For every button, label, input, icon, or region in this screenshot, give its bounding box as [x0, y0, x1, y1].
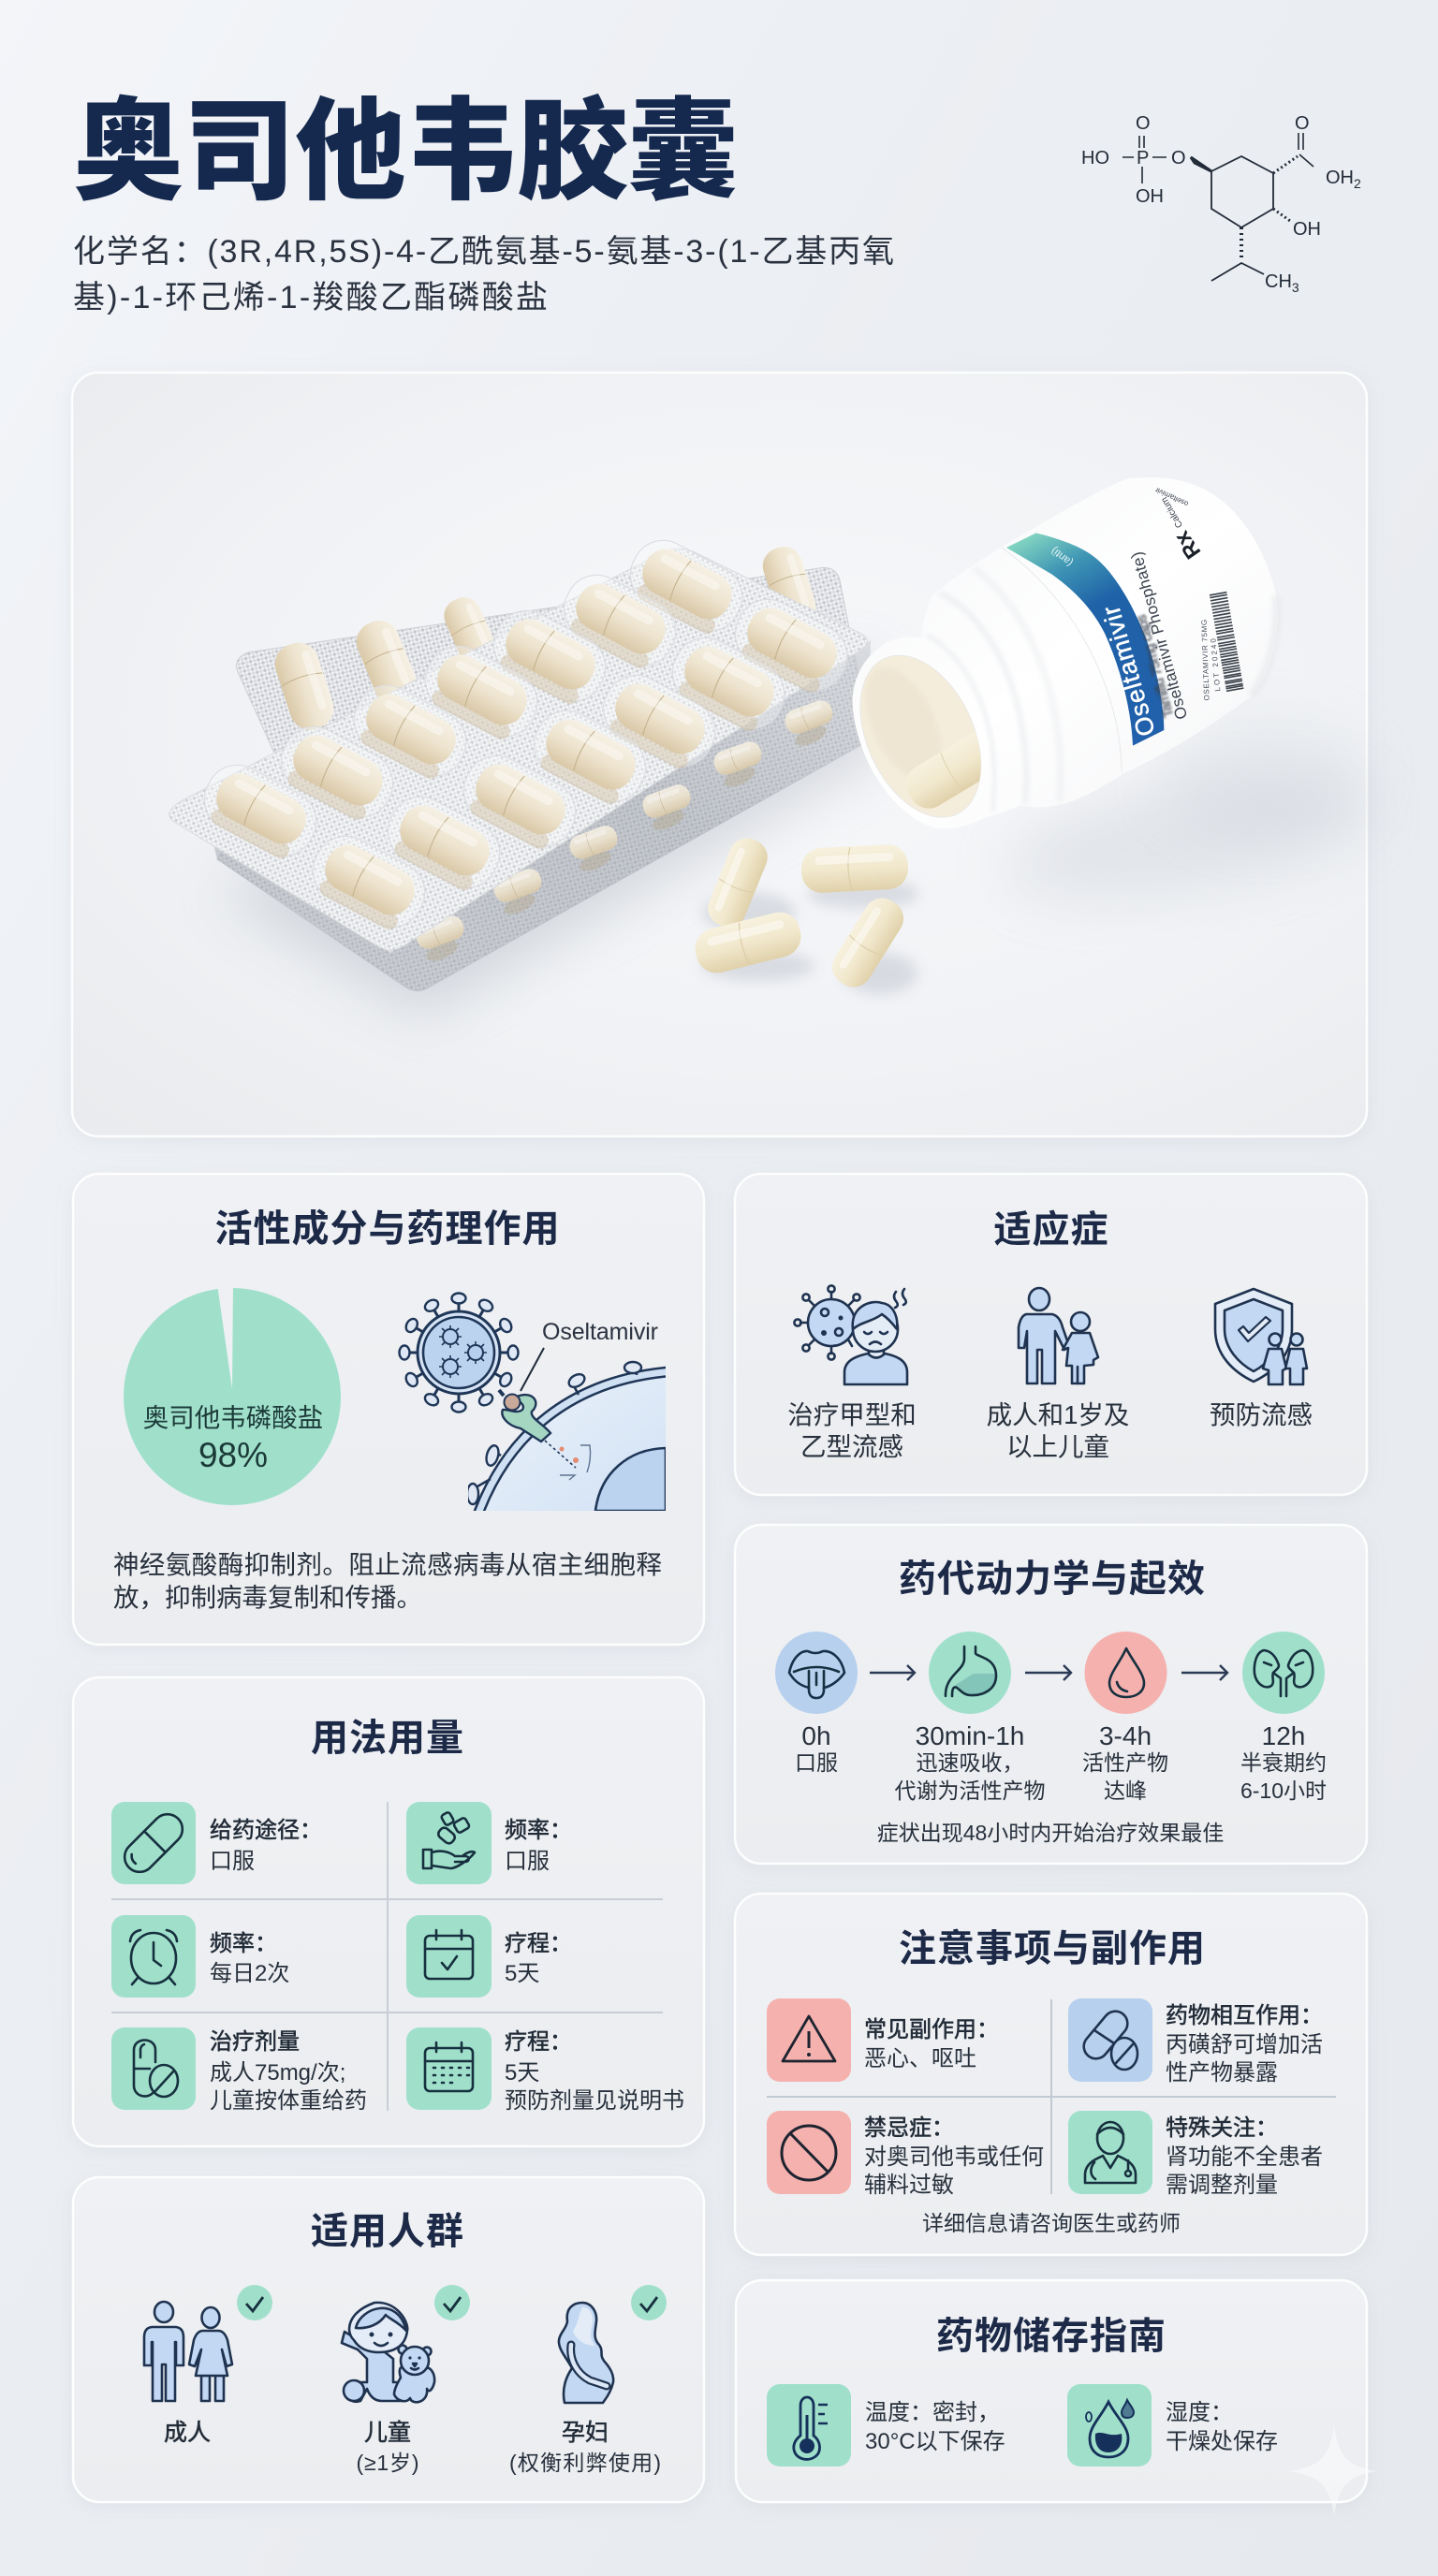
subtitle: chemical name: 化学名：(3R,4R,5S)-4-乙酰氨基-5-氨基-3-(1-乙基丙氧	[73, 234, 894, 270]
item: common side effects	[767, 1998, 999, 2082]
pill bottle with label: Calcium	[1159, 495, 1185, 530]
soft shadows under product	[215, 655, 1383, 1016]
pie chart 98%	[124, 1282, 341, 1505]
item: special attention: 需调整剂量	[1166, 2173, 1278, 2198]
item: treatment dose: 治疗剂量	[210, 2029, 300, 2055]
timeline labels: 6-10小时	[1240, 1778, 1327, 1803]
item: drug interaction: 丙磺舒可增加活	[1166, 2032, 1323, 2057]
back blister pack	[211, 542, 871, 991]
subtitle: chemical name	[73, 234, 894, 315]
item: temperature	[767, 2384, 1005, 2466]
step 2: stomach icon	[929, 1632, 1011, 1714]
item: contraindication: 禁忌症：	[864, 2115, 954, 2141]
adults: 成人	[164, 2420, 211, 2446]
item: route	[111, 1802, 322, 1884]
item: frequency oral: 频率：	[505, 1818, 572, 1843]
note: 症状出现48小时内开始治疗效果最佳	[877, 1821, 1224, 1845]
pie chart 98%: 奥司他韦磷酸盐	[143, 1403, 323, 1432]
heading: 适用人群	[311, 2211, 464, 2252]
timeline labels: 活性产物	[1082, 1750, 1168, 1775]
heading: 药物储存指南	[936, 2316, 1167, 2357]
item: frequency daily	[111, 1915, 289, 1998]
item: treatment dose: 儿童按体重给药	[210, 2088, 367, 2114]
step 3: blood drop icon	[1084, 1632, 1167, 1714]
pill bottle with label: LOT 20240	[1209, 637, 1222, 692]
arrow	[870, 1665, 915, 1680]
pie chart 98%: 98%	[198, 1436, 268, 1474]
item: course and prevention	[406, 2027, 684, 2114]
item: treatment dose	[111, 2027, 367, 2114]
item: temperature: 温度：密封，	[865, 2400, 1000, 2425]
labels: 成人和1岁及	[987, 1400, 1129, 1429]
pill bottle with label: (anti)	[1049, 545, 1076, 568]
chemical structure: 2	[1354, 176, 1361, 191]
chemical structure	[1081, 113, 1361, 295]
timeline labels: 30min-1h	[916, 1721, 1024, 1750]
item: course	[406, 1915, 572, 1998]
front blister pack	[169, 530, 868, 950]
item: contraindication	[767, 2111, 1044, 2198]
heading: 适应症	[994, 1209, 1108, 1251]
icon: shield with family	[1215, 1289, 1307, 1384]
chemical structure: OH	[1293, 219, 1321, 240]
item: frequency oral: 口服	[505, 1849, 550, 1874]
panel: precautions and side effects	[735, 1894, 1367, 2255]
chemical structure: OH	[1136, 186, 1164, 207]
timeline labels: 0h	[801, 1721, 831, 1750]
sparkle watermark	[1289, 2426, 1377, 2516]
chemical structure: OH	[1326, 168, 1354, 188]
item: drug interaction: 药物相互作用：	[1166, 2003, 1323, 2028]
child with teddy bear	[342, 2285, 470, 2475]
item: contraindication: 对奥司他韦或任何	[864, 2144, 1044, 2170]
heading: 用法用量	[311, 1718, 464, 1759]
item: humidity: 干燥处保存	[1166, 2429, 1278, 2454]
item: common side effects: 常见副作用：	[864, 2017, 999, 2042]
timeline labels	[795, 1721, 1327, 1803]
diagram: virus and cell: Oseltamivir	[542, 1319, 658, 1345]
panel: hero photo of capsules and bottle	[72, 373, 1383, 1136]
item: course: 疗程：	[505, 1931, 572, 1956]
labels: 以上儿童	[1006, 1432, 1109, 1461]
pregnant woman	[509, 2285, 667, 2475]
child with teddy bear: 儿童	[364, 2420, 411, 2446]
item: course: 5天	[505, 1961, 539, 1986]
item: course and prevention: 疗程：	[505, 2029, 572, 2055]
timeline labels: 12h	[1262, 1721, 1305, 1750]
labels	[787, 1400, 1313, 1461]
panel: active ingredient and pharmacology	[73, 1174, 704, 1645]
chemical structure: CH	[1265, 271, 1292, 292]
item: common side effects: 恶心、呕吐	[864, 2046, 976, 2071]
chemical structure: O	[1295, 113, 1310, 134]
step 1: oral icon	[775, 1632, 858, 1714]
item: course and prevention: 5天	[505, 2060, 539, 2086]
panel: indications	[735, 1174, 1367, 1495]
chemical structure: O	[1136, 113, 1151, 134]
labels: 治疗甲型和	[787, 1400, 917, 1429]
pill bottle with label: Rx	[1169, 527, 1205, 564]
labels: 乙型流感	[800, 1432, 903, 1461]
panel: pharmacokinetics timeline	[735, 1525, 1367, 1864]
diagram: virus and cell	[399, 1294, 674, 1521]
item: route: 口服	[210, 1849, 255, 1874]
item: contraindication: 辅料过敏	[864, 2173, 954, 2198]
item: special attention	[1068, 2111, 1323, 2198]
pill bottle with label: Oseltamivir	[1096, 603, 1161, 739]
item: course and prevention: 预防剂量见说明书	[505, 2088, 684, 2114]
timeline labels: 代谢为活性产物	[895, 1778, 1045, 1803]
chemical structure: HO	[1081, 148, 1109, 168]
description text: 神经氨酸酶抑制剂。阻止流感病毒从宿主细胞释	[113, 1550, 662, 1579]
icon: adult and child	[1019, 1288, 1098, 1383]
loose capsules	[691, 833, 919, 994]
timeline labels: 迅速吸收，	[916, 1750, 1024, 1775]
timeline labels: 达峰	[1104, 1778, 1147, 1803]
child with teddy bear: (≥1岁)	[356, 2451, 419, 2475]
heading: 注意事项与副作用	[899, 1928, 1206, 1969]
footnote: 详细信息请咨询医生或药师	[922, 2211, 1181, 2235]
timeline labels: 3-4h	[1099, 1721, 1152, 1750]
description text	[113, 1550, 662, 1612]
panel: suitable populations	[73, 2177, 704, 2502]
step 4: kidneys icon	[1242, 1632, 1325, 1714]
chemical structure: O	[1171, 148, 1186, 168]
item: special attention: 肾功能不全患者	[1166, 2144, 1323, 2170]
timeline labels: 半衰期约	[1240, 1750, 1327, 1775]
item: temperature: 30°C以下保存	[865, 2429, 1005, 2454]
item: humidity: 湿度：	[1166, 2400, 1233, 2425]
panel: storage guide	[736, 2280, 1367, 2502]
panel: dosage	[73, 1677, 704, 2146]
labels: 预防流感	[1210, 1400, 1313, 1429]
icon: sick person with virus	[794, 1285, 907, 1384]
pregnant woman: 孕妇	[562, 2420, 609, 2446]
chemical structure: 3	[1292, 280, 1299, 295]
item: drug interaction	[1068, 1998, 1323, 2086]
pill bottle with label: Tamiflu 75mg caps	[1134, 613, 1177, 719]
heading: 药代动力学与起效	[899, 1559, 1206, 1600]
pill bottle with label: OSELTAMIVIR 75MG	[1200, 620, 1211, 701]
item: frequency daily: 频率：	[210, 1931, 277, 1956]
description text: 放，抑制病毒复制和传播。	[113, 1583, 422, 1612]
pill bottle with label	[836, 477, 1278, 837]
chemical structure: P	[1137, 148, 1149, 168]
item: treatment dose: 成人75mg/次;	[210, 2060, 345, 2086]
subtitle: chemical name: 基)-1-环己烯-1-羧酸乙酯磷酸盐	[73, 280, 548, 315]
heading: 活性成分与药理作用	[215, 1208, 560, 1250]
adults	[144, 2285, 272, 2446]
arrow	[1181, 1665, 1227, 1680]
pill bottle with label: oseltamivir	[1153, 486, 1190, 508]
pregnant woman: (权衡利弊使用)	[509, 2451, 661, 2475]
item: frequency daily: 每日2次	[210, 1961, 289, 1986]
item: frequency oral	[406, 1802, 572, 1884]
item: drug interaction: 性产物暴露	[1166, 2060, 1278, 2086]
title: 奥司他韦胶囊	[73, 91, 739, 214]
item: humidity	[1067, 2384, 1278, 2466]
timeline labels: 口服	[795, 1750, 838, 1775]
arrow	[1025, 1665, 1071, 1680]
pill bottle with label: Oseltamivir Phosphate)	[1126, 549, 1191, 722]
item: special attention: 特殊关注：	[1166, 2115, 1278, 2141]
item: route: 给药途径：	[210, 1818, 322, 1843]
